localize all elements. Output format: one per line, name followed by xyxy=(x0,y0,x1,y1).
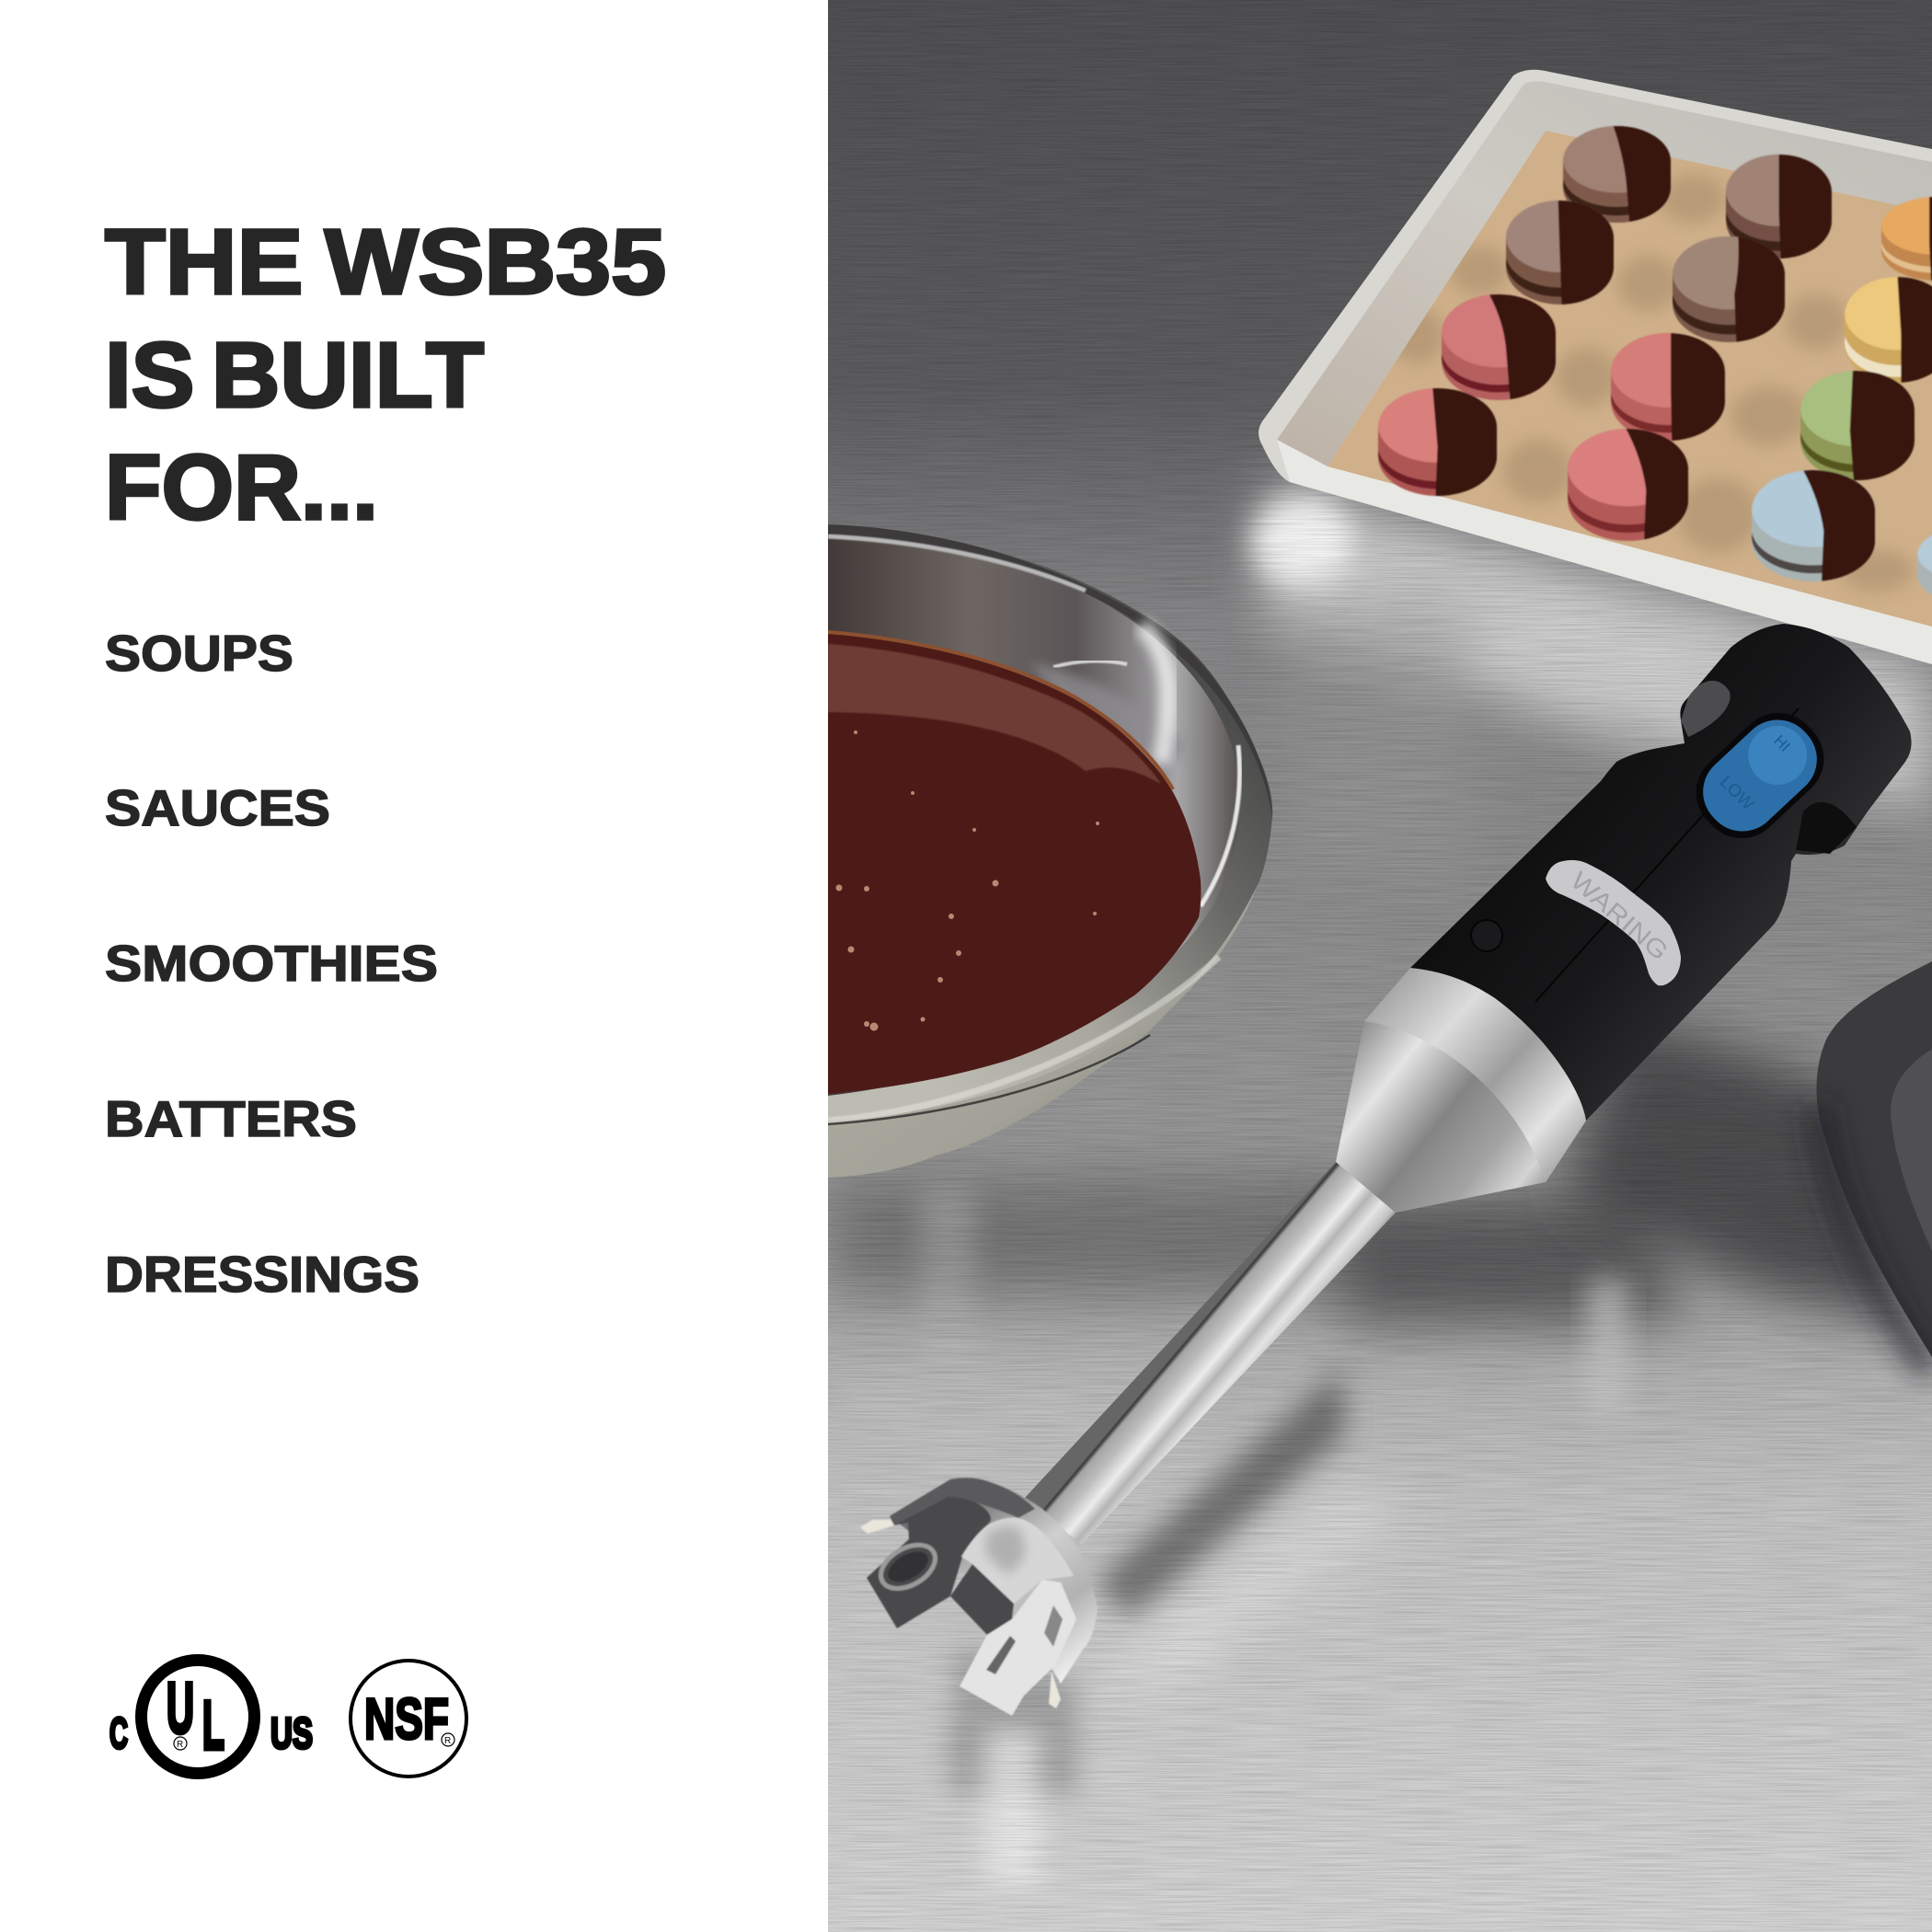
macaron: chocolate 3 xyxy=(1506,201,1614,305)
silver badge xyxy=(1546,860,1681,985)
lower prong xyxy=(960,1580,1076,1716)
certification logo: cULus: C xyxy=(109,1708,128,1757)
certification logo: cULus: R xyxy=(177,1740,183,1750)
brand name: WARING xyxy=(1565,867,1673,966)
macaron: pink 3 xyxy=(1378,388,1497,496)
lighter reflection on chocolate xyxy=(828,644,1161,784)
heading: FOR... xyxy=(105,436,378,539)
stainless steel counter xyxy=(828,0,1932,1932)
bowl rim xyxy=(828,524,1272,1121)
macaron: chocolate 4 xyxy=(1673,236,1785,342)
bowl front rim highlight xyxy=(828,957,1219,1121)
blender: shaft xyxy=(1025,1162,1396,1545)
blender: cone xyxy=(1336,968,1586,1213)
list of uses: DRESSINGS xyxy=(105,1246,420,1303)
macaron: blue 1 xyxy=(1752,470,1875,581)
macaron: pink 4 xyxy=(1568,429,1688,541)
macaron: chocolate 1 xyxy=(1563,126,1671,223)
chocolate surface xyxy=(828,632,1201,1094)
list of uses: SAUCES xyxy=(105,779,330,836)
certification logo: cULus: U xyxy=(167,1667,194,1748)
left prong xyxy=(867,1497,991,1628)
photo panel: blender on stainless counter xyxy=(828,0,1932,1932)
macaron: pink 1 xyxy=(1442,294,1556,400)
list of uses xyxy=(105,625,438,1303)
head bulge xyxy=(1681,681,1731,737)
blender: blade guard xyxy=(860,1478,1098,1716)
bowl outer body xyxy=(828,885,1258,1178)
bowl of melted chocolate xyxy=(828,524,1272,1178)
guard dome xyxy=(890,1478,1098,1684)
heading: IS BUILT xyxy=(105,324,484,427)
middle tab xyxy=(961,1518,1074,1604)
power button dimple xyxy=(1471,920,1502,951)
macaron: chocolate 2 xyxy=(1726,155,1832,259)
macaron shadows on parchment xyxy=(1389,175,1914,591)
list of uses: SMOOTHIES xyxy=(105,935,438,992)
white text panel xyxy=(0,0,828,1932)
heading xyxy=(105,211,666,539)
inner dark area xyxy=(950,1564,1014,1635)
macaron: blue 2 xyxy=(1917,528,1932,602)
certification logo: NSF xyxy=(351,1661,466,1777)
certification logo: NSF: R xyxy=(444,1736,451,1746)
food drips xyxy=(860,1520,894,1534)
macaron: green xyxy=(1800,371,1915,480)
blender: black motor body xyxy=(1410,624,1912,1121)
chocolate bubbles xyxy=(835,730,1099,1030)
heading: THE WSB35 xyxy=(105,211,666,314)
macaron: pink 2 xyxy=(1611,333,1725,441)
list of uses: BATTERS xyxy=(105,1090,357,1147)
button labels: HI xyxy=(1770,731,1794,755)
speed button xyxy=(1679,696,1841,855)
blender: collar xyxy=(1364,968,1586,1182)
list of uses: SOUPS xyxy=(105,625,293,682)
certification logo: cULus: US xyxy=(270,1708,313,1757)
macarons xyxy=(1378,126,1932,602)
right notch xyxy=(1796,802,1857,854)
certification logo: cULus: L xyxy=(202,1686,224,1764)
parchment paper xyxy=(1328,131,1932,627)
certification logo: cULus xyxy=(109,1660,313,1774)
macaron: yellow xyxy=(1845,277,1932,383)
bowl inner wall xyxy=(828,538,1239,1096)
seam line xyxy=(1535,708,1799,1002)
certification logo: NSF: NSF xyxy=(364,1687,449,1752)
macaron: orange xyxy=(1881,197,1932,281)
blender: black motor body: LOW xyxy=(1716,773,1757,814)
dark plate at right edge xyxy=(1816,961,1932,1371)
baking tray xyxy=(1259,70,1932,664)
